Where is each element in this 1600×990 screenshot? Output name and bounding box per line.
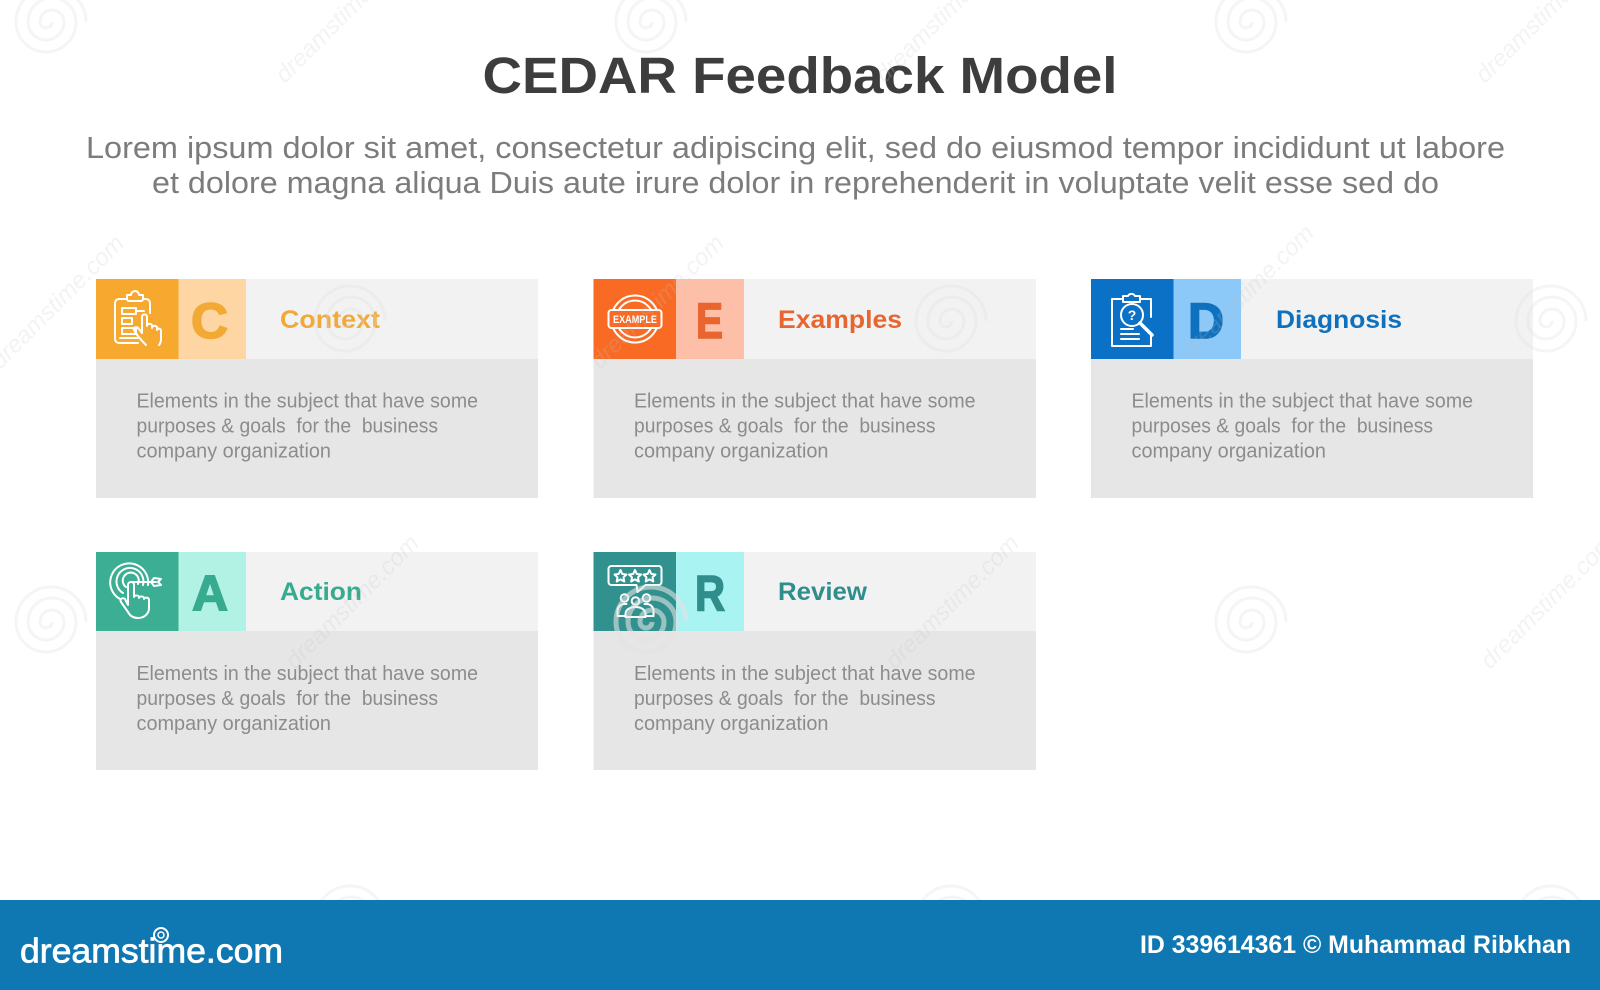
icon: example stamp: [608, 296, 662, 342]
icon: target with hand and arrow: [110, 563, 161, 618]
watermark overlay: dreamstime.com: [585, 230, 730, 374]
text block: purposes & goals for the business: [634, 687, 936, 710]
watermark overlay: dreamstime.com: [280, 530, 425, 674]
icon: clipboard with magnifier: ?: [1128, 307, 1136, 323]
panel: Action: [96, 552, 538, 770]
text block: [1132, 390, 1473, 462]
heading: Review: Review: [778, 578, 868, 606]
text block: purposes & goals for the business: [136, 414, 438, 438]
letter A: A: [192, 566, 228, 622]
title: CEDAR Feedback Model: [482, 47, 1118, 104]
text block: [136, 390, 478, 462]
letter D: D: [1188, 293, 1224, 349]
text block: company organization: [136, 712, 331, 735]
text block: Elements in the subject that have some: [1132, 390, 1473, 412]
letter E: E: [696, 293, 723, 349]
heading: Action: Action: [280, 578, 362, 606]
heading: Examples: Examples: [778, 306, 902, 334]
text block: purposes & goals for the business: [1132, 414, 1433, 438]
text block: company organization: [1132, 440, 1326, 462]
text block: Elements in the subject that have some: [136, 390, 478, 412]
footer bar: [0, 900, 1600, 990]
icon: example stamp: EXAMPLE: [613, 314, 657, 326]
footer logo: dreamstime.com: [20, 932, 283, 970]
panel: Examples: [594, 279, 1036, 498]
panel: Review: [594, 552, 1036, 770]
subtitle text: et dolore magna aliqua Duis aute irure dolor in reprehenderit in voluptate velit esse sed do: [152, 165, 1439, 200]
subtitle text: Lorem ipsum dolor sit amet, consectetur adipiscing elit, sed do eiusmod tempor incididunt ut labore: [86, 130, 1505, 165]
heading: Diagnosis: Diagnosis: [1276, 306, 1402, 334]
text block: Elements in the subject that have some: [634, 390, 976, 412]
text block: Elements in the subject that have some: [634, 662, 976, 685]
text block: [136, 662, 478, 735]
footer credit: ID 339614361 © Muhammad Ribkhan: [1140, 931, 1571, 959]
letter R: R: [695, 566, 725, 622]
text block: Elements in the subject that have some: [136, 662, 478, 685]
watermark overlay: dreamstime.com: [1175, 220, 1320, 364]
icon: star rating and people: [608, 566, 662, 617]
text block: company organization: [634, 440, 828, 462]
text block: company organization: [634, 712, 828, 735]
text block: purposes & goals for the business: [136, 687, 438, 710]
text block: [634, 662, 976, 735]
text block: company organization: [136, 440, 331, 462]
panel: Context: [96, 279, 538, 498]
panel: Diagnosis: [1091, 279, 1533, 498]
icon: clipboard with magnifier: [1112, 294, 1152, 346]
subtitle text: [86, 130, 1505, 200]
text block: purposes & goals for the business: [634, 414, 936, 438]
heading: Context: Context: [280, 306, 381, 334]
watermark overlay: dreamstime.com: [880, 530, 1025, 674]
icon: clipboard with pointing hand: [115, 291, 161, 345]
letter C: C: [191, 293, 228, 349]
text block: [634, 390, 976, 462]
